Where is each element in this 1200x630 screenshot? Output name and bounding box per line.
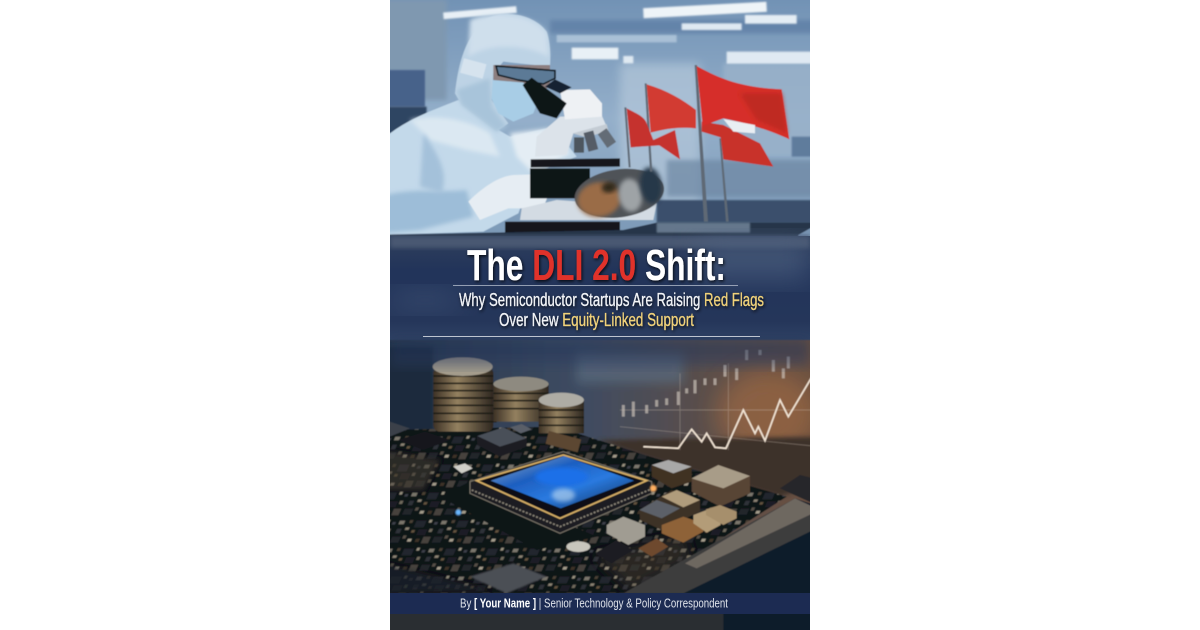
stage	[531, 158, 620, 167]
cover panel	[380, 0, 820, 630]
flag back right	[702, 122, 773, 167]
coin stack large	[433, 357, 497, 432]
candles	[623, 350, 788, 417]
grid lines	[620, 363, 820, 450]
dark navy title band	[390, 236, 810, 350]
price line	[643, 363, 820, 448]
head	[560, 89, 602, 119]
face and goggles	[492, 64, 550, 89]
hood	[455, 14, 550, 132]
arm	[535, 116, 607, 157]
lower divider	[423, 336, 760, 337]
eyepieces	[523, 78, 567, 118]
right side components	[566, 460, 750, 563]
chip package	[470, 452, 652, 533]
blue die	[491, 456, 634, 508]
metal tray frame	[623, 498, 820, 593]
semiconductor wafer	[574, 164, 665, 220]
suit body	[380, 100, 577, 235]
coin stack middle	[493, 377, 549, 422]
flag front	[697, 66, 789, 139]
sparks	[650, 485, 657, 492]
glove	[468, 174, 548, 220]
panel: cleanroom photo	[380, 0, 820, 247]
objectives	[573, 124, 608, 137]
white base	[520, 200, 657, 220]
board backdrop	[390, 340, 810, 593]
coin stack small	[539, 393, 584, 433]
stock chart overlay	[620, 350, 820, 450]
face mask	[492, 80, 538, 122]
stacked chip far	[652, 460, 692, 488]
area under metal tray	[637, 498, 820, 630]
flag poles	[624, 65, 729, 222]
book cover infographic	[390, 0, 810, 630]
title: The DLI 2.0 Shift:	[467, 241, 726, 290]
flag back left	[627, 108, 680, 159]
flag middle	[647, 84, 696, 133]
subtitle line two: Over New Equity-Linked Support	[499, 310, 694, 330]
subtitle line one: Why Semiconductor Startups Are Raising Red Flags	[459, 290, 764, 310]
background chips	[380, 418, 581, 473]
byline strip: By [ Your Name ] | Senior Technology & Policy Correspondent	[460, 596, 728, 610]
circuit board surface	[380, 427, 787, 593]
stacked chip near	[692, 465, 750, 507]
stand body	[530, 168, 590, 198]
title band fade into photo	[390, 336, 810, 366]
main processor chip	[440, 452, 652, 550]
byline strip	[390, 593, 810, 614]
red flags	[624, 65, 789, 222]
right board haze	[597, 437, 820, 497]
board dark patches	[380, 563, 490, 593]
cluster of small components	[639, 490, 700, 530]
panel: circuit board photo	[380, 340, 820, 630]
cleanroom background	[380, 0, 820, 247]
black base	[505, 222, 620, 234]
coin stacks	[433, 357, 584, 433]
title divider	[453, 285, 738, 286]
lower left blurred chip	[470, 563, 547, 593]
microscope	[505, 78, 657, 234]
lower fade	[380, 593, 723, 630]
warm glow behind chart	[708, 364, 810, 440]
bench top	[390, 222, 810, 236]
chip substrate	[440, 482, 597, 550]
technician in cleanroom suit	[380, 14, 577, 235]
